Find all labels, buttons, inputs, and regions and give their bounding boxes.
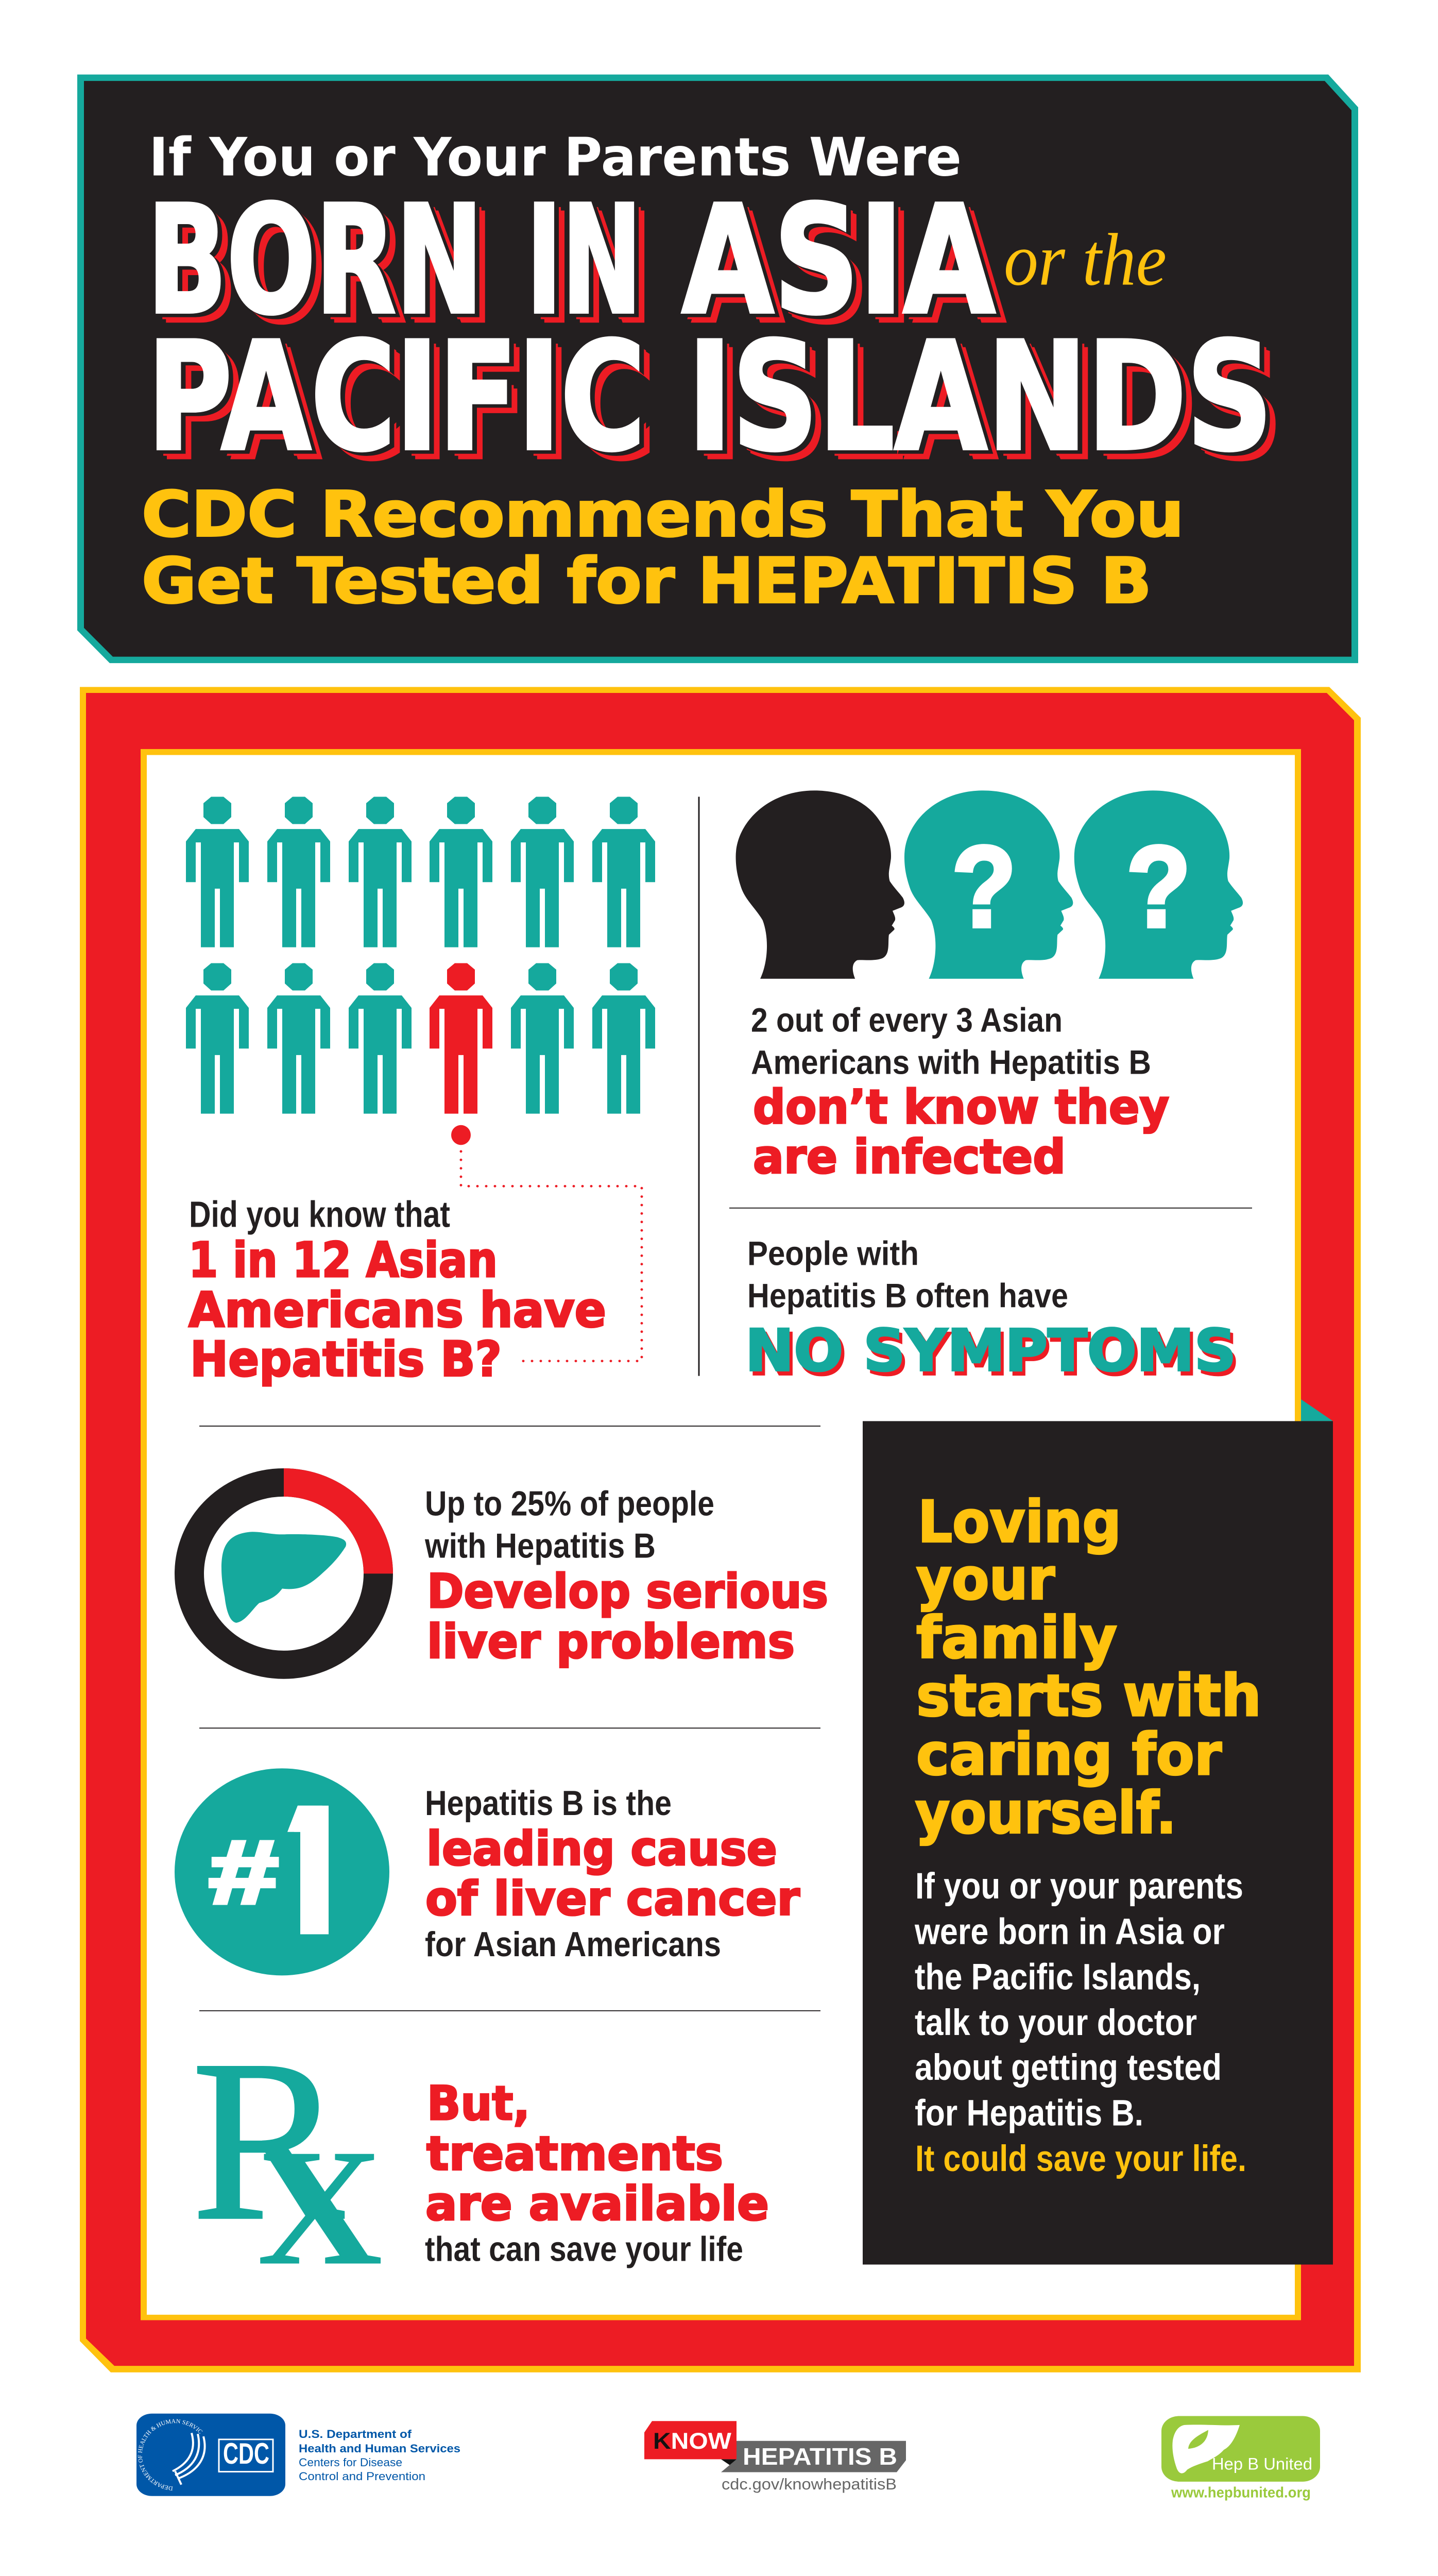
text: treatments are available: treatments [426,2126,723,2181]
text: 25 percent liver problems [424,1484,828,1669]
text: 2 out of every 3 [751,1002,1169,1184]
divider line [199,1727,820,1728]
icon: Rx symbol: X [257,2114,383,2300]
icon: three heads [736,790,1243,979]
icon: number one badge: 1 [246,1760,361,1981]
icon: number one badge: # [209,1823,278,1922]
icon: liver ring 25 percent [190,1468,393,1665]
subheading: cdc recommends: Get Tested for HEPATITIS B [142,545,1152,618]
heading: pacific islands: ISLANDS [698,319,1283,493]
heading: born in asia: IN [531,177,646,351]
know wordmark: KNOW [653,2428,731,2454]
divider line [199,1426,820,1427]
HHS wordmark: U.S. Department of [299,2428,412,2441]
heading: pacific islands: PACIFIC [158,319,656,493]
CDC box [219,2437,273,2472]
HHS wordmark: Health and Human Services [299,2442,460,2455]
text: no symptoms: NO SYMPTOMS [745,1317,1236,1384]
body text: for Hepatitis B. [915,2093,1143,2133]
wordmark: Hep B United [1212,2455,1312,2474]
HHS wordmark: Centers for Disease [299,2456,402,2469]
heading: loving your family [915,1488,1261,1846]
connector: dotted line from red person to text [451,1125,642,1361]
seal eagle [173,2433,205,2485]
text: treatments are available: that can save your life [425,2230,743,2268]
HHS wordmark: Control and Prevention [299,2470,425,2483]
text: treatments are available [425,2076,769,2268]
text: 25 percent liver problems: with Hepatitis B [424,1527,656,1565]
panel: header [77,75,1358,663]
heading: born in asia: ASIA [687,177,1001,351]
heading: pacific islands: PACIFIC [152,314,650,487]
body text: If you or your parents [915,1866,1243,1907]
body text: the Pacific Islands, [915,1957,1201,1997]
icon: three heads: ? [1126,823,1191,951]
text: leading cause of liver cancer: leading cause [426,1821,777,1876]
text: 25 percent liver problems: liver problems [427,1614,795,1669]
text: leading cause of liver cancer [425,1784,800,1963]
body text: talk to your doctor [915,2002,1197,2043]
heading: if you or your parents were: If You or Your Parents Were [149,126,962,188]
text: no symptoms: People with [747,1235,919,1273]
heading: pacific islands [147,311,1283,493]
logo: hep b united [1161,2416,1320,2501]
CDC box: CDC [223,2437,269,2470]
url: cdc.gov/knowhepatitisB [722,2476,897,2493]
heading: born in asia [147,174,1006,357]
heading: born in asia: IN [537,183,652,357]
heading: born in asia: BORN [152,177,488,351]
vertical divider [698,796,699,1376]
text: 2 out of every 3: are infected [753,1129,1066,1184]
text: no symptoms: NO SYMPTOMS [748,1321,1239,1388]
text: treatments are available: But, [427,2076,530,2131]
icon: Rx symbol: R [192,2012,345,2268]
text: 1 in 12 asian americans: Americans have [189,1283,606,1338]
heading: pacific islands: PACIFIC [147,311,645,484]
body text: were born in Asia or [914,1911,1225,1952]
text: 1 in 12 asian americans: 1 in 12 Asian [189,1232,498,1288]
panel: main frame [80,687,1361,2372]
heading: loving your family: family [916,1604,1117,1671]
heading: pacific islands: PACIFIC [154,316,652,489]
heading: loving your family: your [916,1546,1055,1613]
text: 25 percent liver problems: Develop serious [427,1564,828,1619]
text: 2 out of every 3: 2 out of every 3 Asian [751,1002,1063,1039]
text: leading cause of liver cancer: Hepatitis B is the [425,1784,672,1823]
text: 1 in 12 asian americans [189,1194,606,1387]
text: treatments are available: are available [425,2176,769,2231]
heading: loving your family: Loving [918,1488,1121,1555]
logo: know hepatitis B [644,2421,906,2493]
body text: about getting tested [915,2047,1222,2088]
heading: pacific islands: ISLANDS [692,314,1277,487]
HHS wordmark [299,2428,460,2483]
seal text: DEPARTMENT OF HEALTH & HUMAN SERVICES · USA [138,2419,203,2490]
script: or the: or the [1004,218,1167,301]
text: no symptoms: Hepatitis B often have [747,1278,1068,1315]
heading: born in asia: IN [526,174,642,347]
heading: loving your family: caring for [916,1721,1222,1788]
heading: pacific islands: ISLANDS [694,316,1279,489]
pictogram: 12 people, one highlighted [186,796,655,1114]
text: 25 percent liver problems: Up to 25% of people [425,1484,714,1523]
hepatitis B wordmark: HEPATITIS B [743,2443,897,2470]
text: 2 out of every 3: Americans with Hepatitis B [751,1044,1151,1081]
text: 1 in 12 asian americans: Hepatitis B? [190,1332,502,1387]
heading: born in asia: BORN [147,174,483,347]
icon: number one badge [175,1760,389,1981]
panel: call to action [863,1399,1333,2264]
icon: three heads: ? [952,823,1016,951]
divider line [729,1208,1252,1209]
text: 2 out of every 3: don’t know they [753,1079,1169,1134]
heading: loving your family: starts with [916,1662,1261,1730]
icon: liver leaf [1172,2425,1240,2473]
heading: born in asia: BORN [154,179,490,353]
text: 1 in 12 asian americans: Did you know that [189,1194,450,1235]
heading: loving your family: yourself. [915,1780,1176,1846]
body text: It could save your life. [915,2138,1246,2179]
subheading: cdc recommends: CDC Recommends That You [142,478,1184,551]
body text [914,1866,1246,2179]
text: leading cause of liver cancer: for Asian Americans [425,1925,721,1963]
logo: HHS CDC [136,2413,460,2496]
text: leading cause of liver cancer: of liver cancer [425,1871,800,1926]
subheading: cdc recommends [142,478,1184,618]
heading: born in asia: ASIA [692,183,1006,357]
heading: born in asia: ASIA [682,174,996,347]
url: www.hepbunited.org [1171,2484,1311,2501]
heading: born in asia: IN [533,179,648,353]
divider line [199,2010,820,2011]
heading: born in asia: BORN [158,183,493,357]
text: no symptoms [745,1235,1239,1388]
heading: pacific islands: ISLANDS [688,311,1273,484]
heading: born in asia: ASIA [689,179,1003,353]
